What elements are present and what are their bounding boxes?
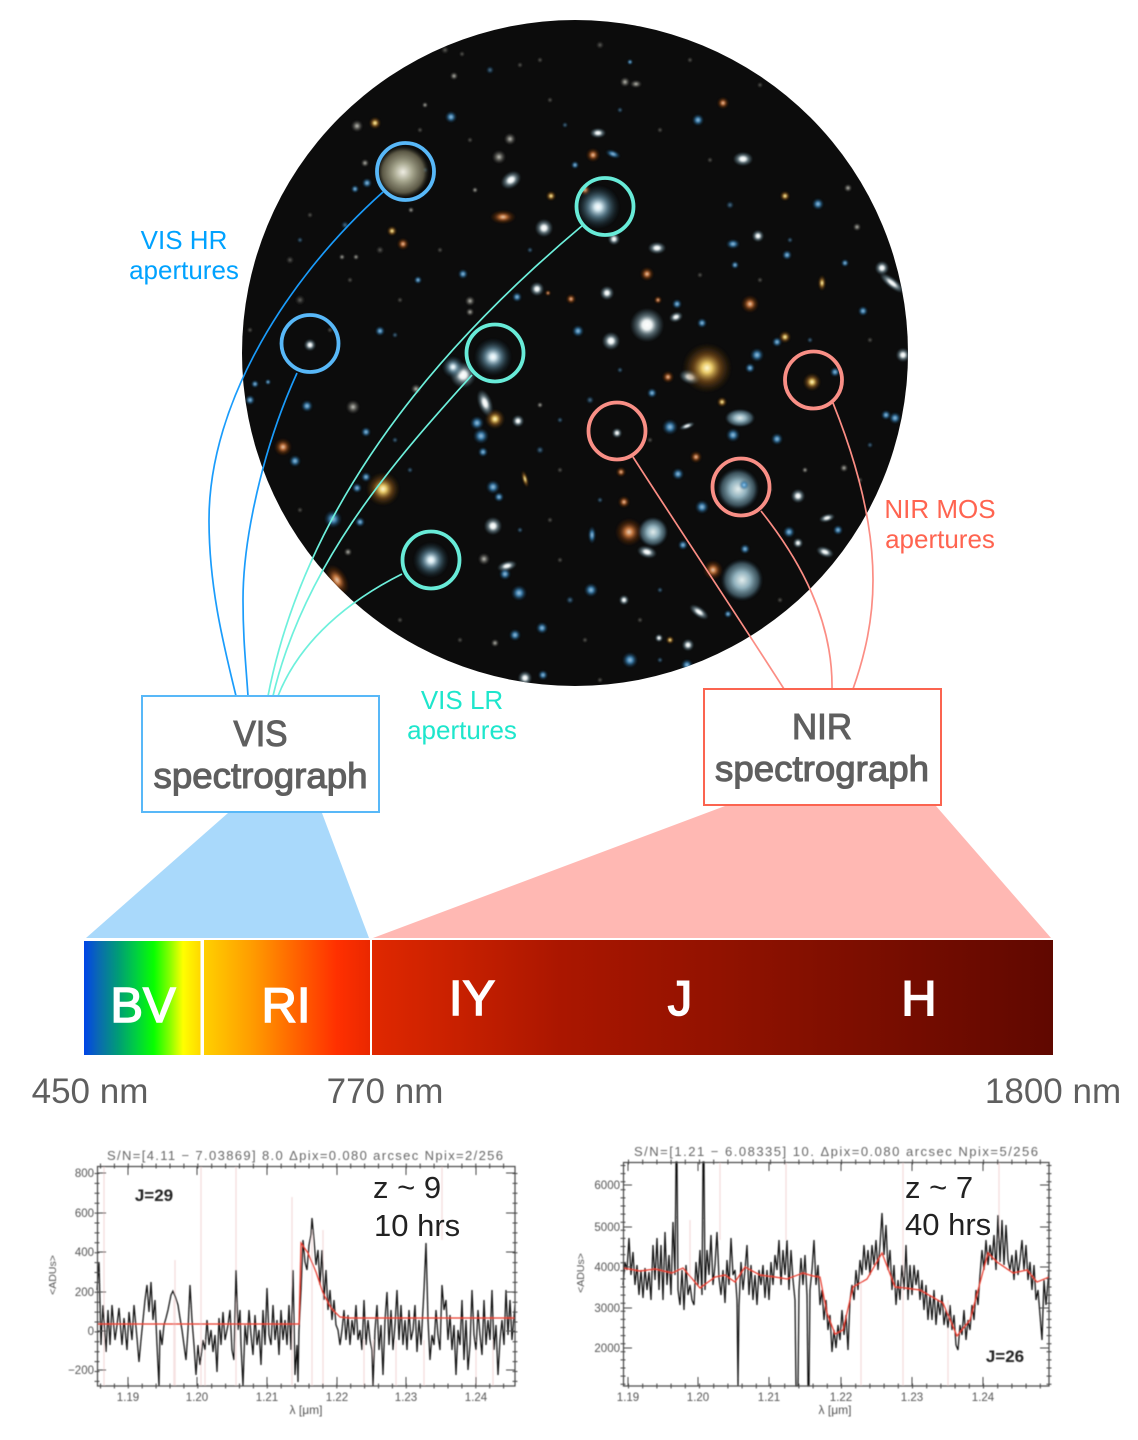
y axis tick labels: 600 xyxy=(75,1208,94,1220)
magnitude label: J=26 xyxy=(986,1347,1024,1366)
x axis title: λ [μm] xyxy=(290,1403,322,1417)
chart title: S/N=[4.11 − 7.03869] 8.0 Δpix=0.080 arcsec Npix=2/256 xyxy=(107,1148,503,1163)
magnitude label: J=29 xyxy=(135,1186,173,1205)
box: NIR spectrograph xyxy=(704,689,941,805)
wedge: NIR spectrograph to infrared band xyxy=(373,806,1051,938)
black spectrum trace xyxy=(623,1162,1049,1386)
x axis tick labels: 1.23 xyxy=(395,1392,417,1404)
annotation: redshift and exposure: 40 hrs xyxy=(905,1207,991,1242)
y axis tick labels: 5000 xyxy=(594,1222,620,1234)
x axis tick labels: 1.22 xyxy=(830,1392,852,1404)
x axis tick labels: 1.21 xyxy=(758,1392,780,1404)
x axis tick labels: 1.23 xyxy=(901,1392,923,1404)
red model fit xyxy=(97,1243,515,1324)
x axis tick labels xyxy=(617,1392,995,1404)
y axis tick labels xyxy=(68,1168,94,1377)
spectrum bar xyxy=(84,940,1053,1055)
annotation: redshift and exposure: z ~ 9 xyxy=(373,1170,441,1205)
wedge: VIS spectrograph to visible band xyxy=(86,813,369,938)
black spectrum trace xyxy=(97,1218,515,1386)
red model fit xyxy=(623,1253,1049,1336)
band: IY J H xyxy=(372,940,1053,1055)
x axis tick labels: 1.24 xyxy=(972,1392,995,1404)
plot frame and ticks xyxy=(623,1162,1049,1386)
band: BV: BV xyxy=(110,979,176,1033)
panel: deep field sky image xyxy=(242,20,910,686)
x axis tick labels: 1.20 xyxy=(687,1392,709,1404)
plot frame and ticks xyxy=(97,1166,515,1386)
x axis tick labels: 1.24 xyxy=(465,1392,488,1404)
y axis tick labels xyxy=(594,1180,620,1355)
x axis tick labels: 1.22 xyxy=(326,1392,348,1404)
band: IY J H: J xyxy=(668,972,692,1026)
band: BV xyxy=(84,941,200,1055)
y axis tick labels: 200 xyxy=(75,1287,94,1299)
VIS HR aperture fibres xyxy=(209,192,383,696)
y axis tick labels: −200 xyxy=(68,1365,94,1377)
box: VIS spectrograph: VIS xyxy=(234,713,288,754)
band: IY J H: H xyxy=(901,972,937,1026)
chart: z~9 spectrum xyxy=(47,1148,515,1417)
chart title: S/N=[1.21 − 6.08335] 10. Δpix=0.080 arcsec Npix=5/256 xyxy=(634,1144,1038,1159)
sky line residuals xyxy=(104,1166,493,1386)
box: VIS spectrograph xyxy=(142,696,379,812)
x axis tick labels: 1.21 xyxy=(256,1392,278,1404)
box: NIR spectrograph: NIR xyxy=(792,706,852,747)
y axis tick labels: 400 xyxy=(75,1247,94,1259)
x axis tick labels: 1.19 xyxy=(117,1392,139,1404)
y axis tick labels: 4000 xyxy=(594,1262,620,1274)
label: VIS HR apertures: apertures xyxy=(129,255,239,285)
VIS LR aperture fibres xyxy=(268,225,583,696)
y axis tick labels: 0 xyxy=(88,1326,94,1338)
label: NIR MOS apertures: apertures xyxy=(885,524,995,554)
y axis tick labels: 2000 xyxy=(594,1343,620,1355)
y axis title: <ADUs> xyxy=(575,1253,587,1293)
annotation: redshift and exposure: 10 hrs xyxy=(374,1208,460,1243)
label: VIS HR apertures: VIS HR xyxy=(141,225,227,255)
band: RI xyxy=(204,940,370,1055)
x axis title: λ [μm] xyxy=(819,1403,851,1417)
label: NIR MOS apertures: NIR MOS xyxy=(884,494,996,524)
band: RI: RI xyxy=(262,979,310,1033)
x axis tick labels: 1.20 xyxy=(186,1392,208,1404)
band: IY J H: IY xyxy=(449,972,495,1026)
annotation: redshift and exposure: z ~ 7 xyxy=(905,1170,973,1205)
NIR MOS aperture circles xyxy=(588,352,842,516)
y axis tick labels: 6000 xyxy=(594,1180,620,1192)
box: VIS spectrograph: spectrograph xyxy=(154,755,368,796)
NIR MOS aperture fibres xyxy=(633,403,873,689)
x axis tick labels: 1.19 xyxy=(617,1392,639,1404)
wavelength label: 450 nm: 450 nm xyxy=(32,1072,148,1111)
galaxies and stars xyxy=(245,41,910,685)
sky line residuals xyxy=(690,1162,999,1386)
wavelength label: 770 nm: 770 nm xyxy=(327,1072,443,1111)
box: NIR spectrograph: spectrograph xyxy=(715,748,929,789)
wavelength label: 1800 nm: 1800 nm xyxy=(985,1072,1121,1111)
label: VIS LR apertures: VIS LR xyxy=(421,685,503,715)
VIS LR aperture circles xyxy=(402,178,634,588)
y axis tick labels: 800 xyxy=(75,1168,94,1180)
label: VIS LR apertures: apertures xyxy=(407,715,517,745)
y axis title: <ADUs> xyxy=(47,1255,59,1295)
y axis tick labels: 3000 xyxy=(594,1303,620,1315)
chart: z~7 spectrum xyxy=(575,1144,1049,1417)
VIS HR aperture circles xyxy=(282,143,434,372)
x axis tick labels xyxy=(117,1392,488,1404)
